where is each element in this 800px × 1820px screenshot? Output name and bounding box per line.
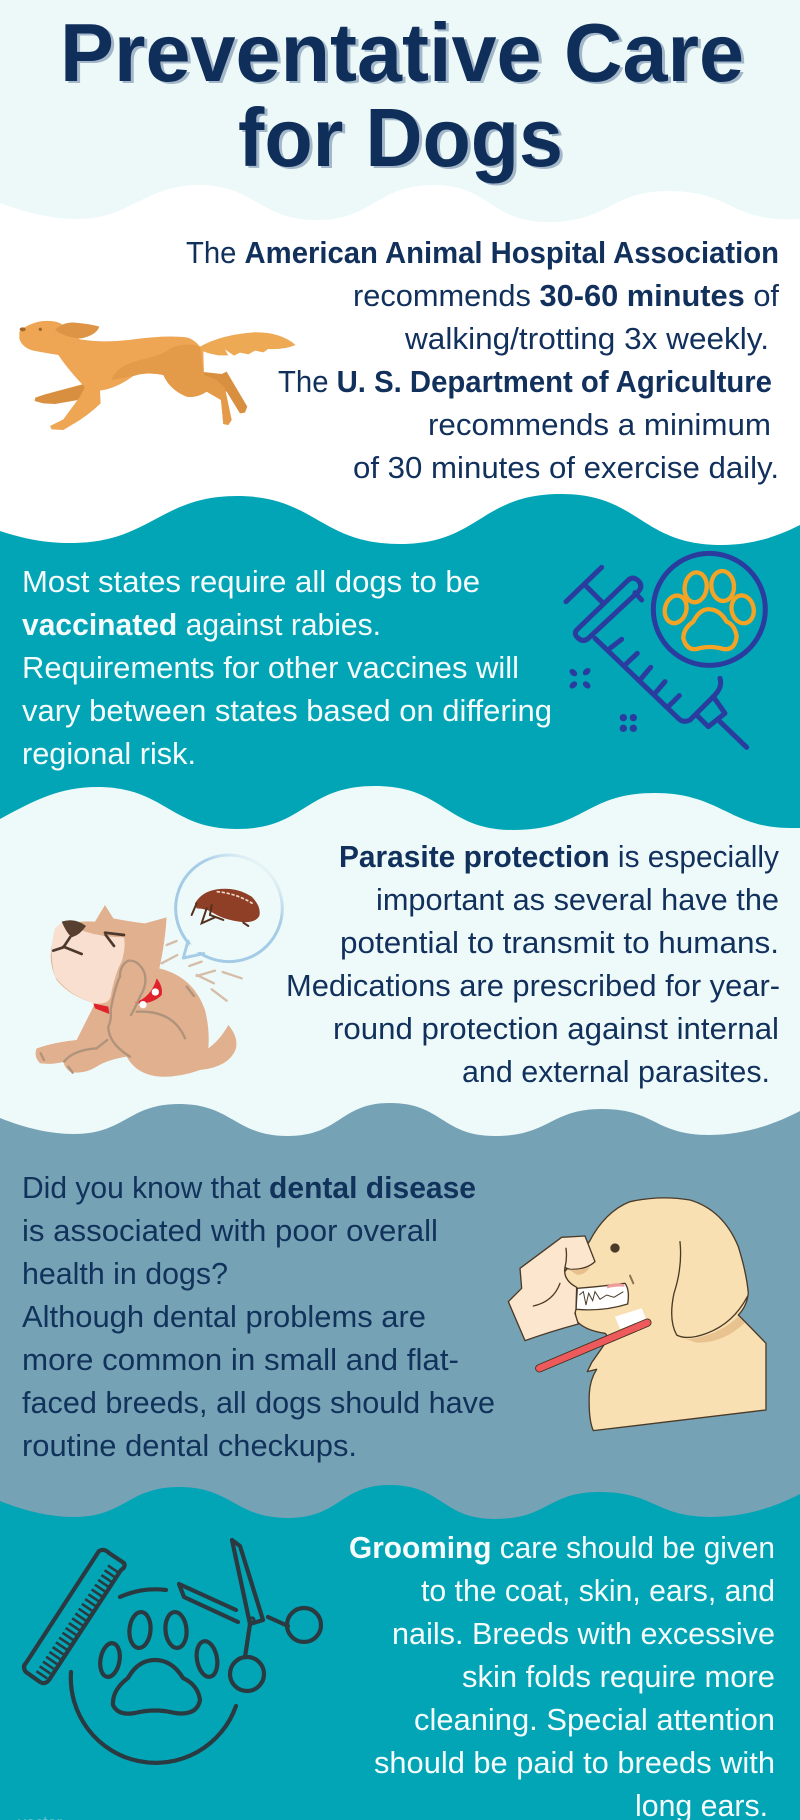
text block: parasite protection: Parasite protection is especially bbox=[339, 839, 779, 874]
dog nose bbox=[20, 327, 26, 331]
ear shadow bbox=[687, 1317, 745, 1343]
scratch marks bbox=[162, 941, 242, 1001]
panel: dental background bbox=[0, 1103, 800, 1820]
text block: vaccination: Requirements for other vaccines will bbox=[22, 650, 519, 685]
text block: exercise recommendations: walking/trotting 3x weekly. bbox=[404, 321, 769, 356]
dog tail bbox=[200, 332, 296, 356]
muzzle shade bbox=[568, 1267, 590, 1275]
text block: dental disease: more common in small and flat- bbox=[22, 1342, 459, 1377]
dog face lines bbox=[53, 933, 124, 954]
hand crease lines bbox=[533, 1248, 566, 1306]
speech bubble bbox=[176, 855, 282, 962]
dog whisker mark bbox=[630, 1276, 633, 1283]
sparkle dots bbox=[568, 667, 637, 732]
syringe outline bbox=[566, 567, 747, 747]
text block: parasite protection bbox=[286, 839, 780, 1089]
text block: dental disease bbox=[22, 1170, 495, 1463]
title: for Dogs bbox=[238, 91, 563, 184]
text block: vaccination: vary between states based on differing bbox=[22, 693, 552, 728]
dog body bbox=[19, 321, 232, 430]
dog collar bbox=[93, 978, 162, 1014]
panel: vaccination background bbox=[0, 494, 800, 1820]
dog far front leg bbox=[35, 383, 86, 404]
dog nose bbox=[62, 920, 86, 937]
paw print bbox=[662, 570, 756, 649]
dog eye bbox=[610, 1243, 620, 1253]
text block: exercise recommendations: The U. S. Department of Agriculture bbox=[278, 364, 772, 399]
text block: exercise recommendations: recommends 30-60 minutes of bbox=[353, 278, 779, 313]
comb bbox=[24, 1550, 125, 1683]
panel: parasite background bbox=[0, 786, 800, 1820]
icon: comb, scissors and paw bbox=[24, 1540, 321, 1763]
text block: parasite protection: potential to transmit to humans. bbox=[340, 925, 779, 960]
dog eye bbox=[39, 328, 42, 331]
text block: vaccination: vaccinated against rabies. bbox=[22, 607, 381, 642]
text block: grooming: to the coat, skin, ears, and bbox=[421, 1573, 775, 1608]
text block: vaccination bbox=[22, 564, 552, 771]
panel: grooming background bbox=[0, 1485, 800, 1820]
text block: dental disease: Did you know that dental disease bbox=[22, 1170, 476, 1205]
toothbrush head bbox=[615, 1308, 647, 1329]
dog body bbox=[36, 905, 236, 1077]
dog far hind leg bbox=[200, 372, 247, 413]
text block: parasite protection: and external parasites. bbox=[462, 1054, 770, 1089]
icon: syringe with paw bbox=[566, 553, 765, 747]
text block: dental disease: routine dental checkups. bbox=[22, 1428, 357, 1463]
text block: vaccination: regional risk. bbox=[22, 736, 196, 771]
icon: running dog bbox=[19, 321, 296, 430]
title bbox=[60, 6, 744, 184]
scissors bbox=[179, 1540, 321, 1691]
dog silhouette bbox=[563, 1198, 766, 1431]
text block: vaccination: Most states require all dogs to be bbox=[22, 564, 480, 599]
text block: exercise recommendations: of 30 minutes of exercise daily. bbox=[353, 450, 779, 485]
text block: exercise recommendations: recommends a minimum bbox=[428, 407, 771, 442]
text block: grooming: should be paid to breeds with bbox=[374, 1745, 775, 1780]
text block: exercise recommendations: The American Animal Hospital Association bbox=[186, 235, 779, 270]
paw circle bbox=[653, 553, 765, 665]
text block: dental disease: faced breeds, all dogs should have bbox=[22, 1385, 495, 1420]
panel: title background bbox=[0, 0, 800, 240]
text block: grooming: nails. Breeds with excessive bbox=[392, 1616, 775, 1651]
hand bbox=[508, 1236, 595, 1341]
text block: parasite protection: important as several have the bbox=[376, 882, 779, 917]
title: Preventative Care bbox=[60, 6, 744, 99]
dog ear bbox=[672, 1242, 747, 1337]
dog teeth bbox=[576, 1283, 628, 1310]
icon: dog having teeth brushed bbox=[508, 1198, 766, 1431]
dog hindquarter shading bbox=[112, 345, 232, 425]
text block: dental disease: health in dogs? bbox=[22, 1256, 228, 1291]
text block: grooming bbox=[349, 1530, 775, 1820]
dog ear bbox=[55, 323, 99, 338]
text block: dental disease: is associated with poor overall bbox=[22, 1213, 438, 1248]
flea bbox=[192, 889, 260, 926]
text block: dental disease: Although dental problems are bbox=[22, 1299, 426, 1334]
text block: grooming: cleaning. Special attention bbox=[414, 1702, 775, 1737]
text block: exercise recommendations bbox=[186, 235, 779, 485]
text block: grooming: Grooming care should be given bbox=[349, 1530, 775, 1565]
circle arcs bbox=[71, 1589, 236, 1763]
text block: grooming: skin folds require more bbox=[462, 1659, 775, 1694]
icon: scratching dog with flea bbox=[36, 855, 282, 1077]
dog face bbox=[52, 923, 125, 1004]
dog limb outlines bbox=[41, 961, 194, 1073]
text block: parasite protection: round protection against internal bbox=[333, 1011, 779, 1046]
paw print bbox=[98, 1611, 220, 1714]
text block: parasite protection: Medications are prescribed for year- bbox=[286, 968, 780, 1003]
toothbrush handle bbox=[539, 1323, 647, 1368]
